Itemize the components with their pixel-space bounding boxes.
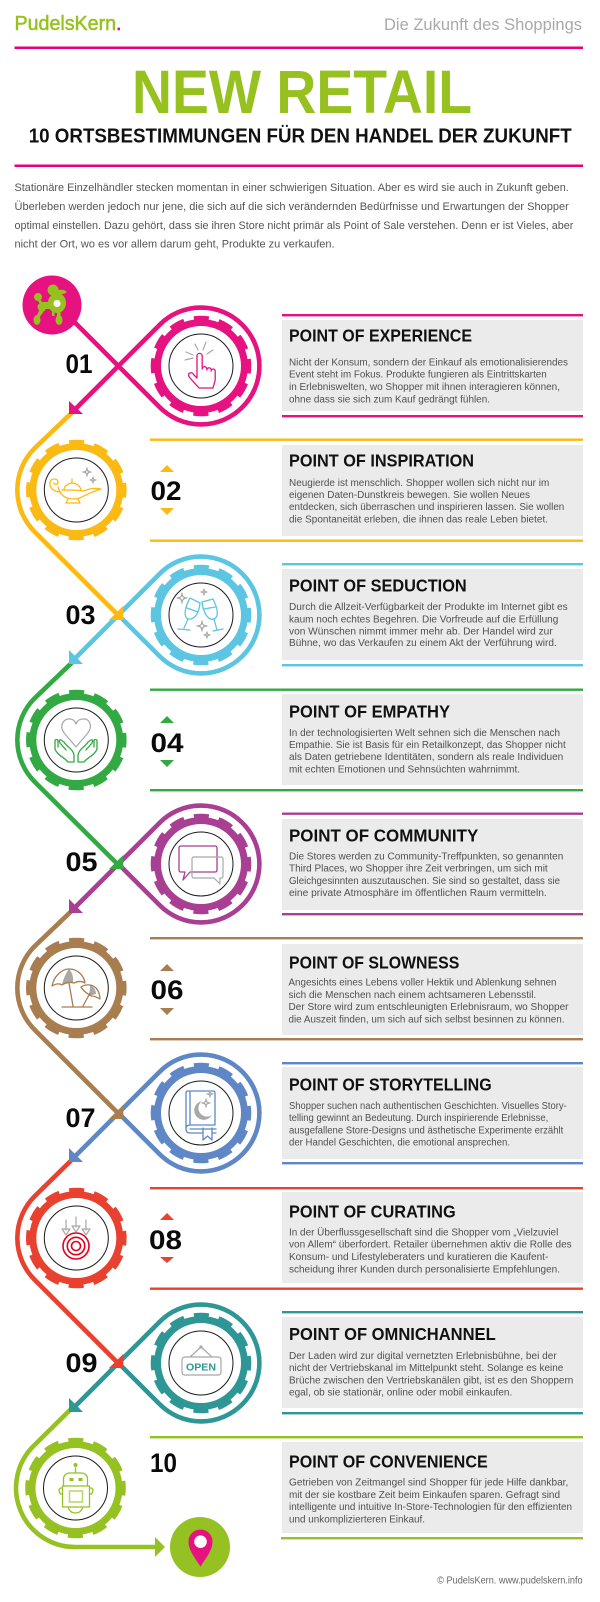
body 07: Shopper suchen nach authentischen Geschichten. Visuelles Story- <box>289 1101 567 1112</box>
step 04: empathy <box>17 650 583 865</box>
body 05: Gleichgesinnten auszutauschen. Sie sind so gestaltet, dass sie <box>289 876 560 887</box>
icon: robot <box>59 1463 93 1513</box>
card 01 <box>282 314 583 417</box>
body 01: Event steht im Fokus. Produkte fungieren als Eintrittskarten <box>289 370 547 381</box>
connector path 05 <box>73 806 259 922</box>
intro text: nicht der Ort, wo es vor allem darum geht, Produkte zu verkaufen. <box>14 239 334 251</box>
body 05: Third Places, wo Shopper ihre Zeit verbringen, um sich mit <box>289 864 548 875</box>
card 07 <box>282 1062 583 1164</box>
intro text: Überleben werden jedoch nur jene, die sich auf die sich verändernden Bedürfnisse und Erwartungen der Shopper <box>14 201 569 213</box>
number 01: 01 <box>66 349 92 379</box>
body 09 <box>289 1351 573 1399</box>
number 10: 10 <box>150 1448 177 1478</box>
heading 07: POINT OF STORYTELLING <box>289 1075 492 1095</box>
step 06: slowness <box>17 899 583 1114</box>
arrow into step 08 <box>69 1148 83 1162</box>
body 02: entdecken, sich überraschen und inspirieren lassen. Sie wollen <box>289 502 564 513</box>
icon: heart in hands <box>55 719 97 762</box>
body 03: Bühne, wo das Verkaufen zu einem Akt der Verführung wird. <box>289 638 557 649</box>
icon: open sign: OPEN <box>186 1362 216 1374</box>
icon: open sign <box>182 1345 221 1375</box>
body 05 <box>289 851 563 899</box>
body 04: Empathie. Sie ist Basis für ein Retailkonzept, das Shopper nicht <box>289 740 566 751</box>
body 10: Getrieben von Zeitmangel sind Shopper für jede Hilfe dankbar, <box>289 1478 568 1489</box>
icon: beach umbrellas <box>52 969 100 1007</box>
body 06: Angesichts eines Lebens voller Hektik und Ablenkung sehnen <box>288 978 556 989</box>
connector path 01 <box>68 308 259 424</box>
gear 08 <box>28 1190 124 1286</box>
body 07: telling gewinnt an Bedeutung. Durch inspirierende Erlebnisse, <box>289 1113 548 1124</box>
arrow into step 02 <box>69 401 83 414</box>
body 01: ohne dass sie sich zum Kauf gedrängt fühlen. <box>289 394 490 405</box>
step 01: experience <box>22 276 583 424</box>
body 05: eine private Atmosphäre im öffentlichen Raum vermitteln. <box>289 888 547 899</box>
number 02 with markers <box>150 465 182 515</box>
step 05: community <box>66 806 583 922</box>
title: NEW RETAIL <box>132 58 472 126</box>
arrow into step 09 <box>109 1354 123 1368</box>
icon: magic lamp <box>50 468 101 503</box>
body 08: von Allem“ überfordert. Retailer übernehmen aktiv die Rolle des <box>289 1240 572 1251</box>
body 08: scheidung ihrer Kunden durch personalisierte Empfehlungen. <box>289 1265 560 1276</box>
card 09 <box>282 1311 583 1414</box>
connector path 03 <box>73 557 259 673</box>
body 10: und unkomplizierteren Einkauf. <box>289 1514 425 1525</box>
heading 09: POINT OF OMNICHANNEL <box>289 1324 496 1344</box>
icon: target with arrows <box>62 1217 90 1259</box>
body 06: die Auszeit finden, um sich auf sich selbst besinnen zu können. <box>288 1014 564 1025</box>
body 07 <box>289 1101 567 1149</box>
connector path 06 <box>17 911 118 1114</box>
card 04 <box>150 688 583 791</box>
card 03 <box>282 563 583 666</box>
body 01 <box>289 358 568 405</box>
connector path 02 <box>17 413 118 615</box>
card 02 <box>150 438 583 542</box>
icon: story book <box>186 1091 216 1140</box>
gear 02 <box>28 442 124 538</box>
arrow into destination <box>155 1537 165 1557</box>
step 10: convenience <box>16 1398 583 1577</box>
body 04: mit echten Emotionen und Sehnsüchten wahrnimmt. <box>289 764 520 775</box>
body 02: Neugierde ist menschlich. Shopper wollen sich nicht nur im <box>289 478 549 489</box>
card 05 <box>282 812 583 915</box>
step 08: curating <box>17 1148 583 1364</box>
heading 06: POINT OF SLOWNESS <box>289 952 459 972</box>
arrow into step 10 <box>69 1398 83 1412</box>
intro text: optimal einstellen. Dazu gehört, dass sie ihren Store nicht primär als Point of Sale verstehen. Denn er ist Vieles, aber <box>14 220 574 232</box>
icon: pointing hand <box>185 342 215 388</box>
body 09: Brüche zwischen den Vertriebskanälen gibt, ist es den Shoppern <box>289 1375 573 1386</box>
number 09: 09 <box>66 1348 98 1378</box>
number 08 with markers: 08 <box>149 1225 182 1255</box>
logo: PudelsKern. <box>14 13 122 35</box>
gear 06 <box>28 940 124 1036</box>
heading 04: POINT OF EMPATHY <box>289 702 450 722</box>
body 02: die Spontaneität erleben, die ihnen das reale Leben bietet. <box>289 515 548 526</box>
connector path 04 <box>17 663 118 865</box>
body 05: Die Stores werden zu Community-Treffpunkten, so genannten <box>289 851 563 862</box>
body 07: der Handel Geschichten, die emotional ansprechen. <box>289 1138 510 1149</box>
number 05: 05 <box>66 847 98 877</box>
body 04: als Daten getriebene Identitäten, sondern als reale Individuen <box>289 752 563 763</box>
arrow into step 04 <box>69 650 83 664</box>
gear 01 <box>153 318 249 414</box>
arrow into step 07 <box>109 1105 123 1119</box>
body 07: ausgefallene Store-Designs und ästhetische Experimente erzählt <box>289 1125 564 1136</box>
body 10 <box>289 1478 572 1525</box>
number 04 with markers <box>150 716 184 767</box>
icon: poodle start badge <box>22 276 82 334</box>
card 08 <box>150 1187 583 1290</box>
header <box>14 13 582 35</box>
body 08: In der Überflussgesellschaft sind die Shopper vom „Vielzuviel <box>289 1227 558 1239</box>
number 02 with markers: 02 <box>150 476 182 506</box>
body 09: Der Laden wird zur digital vernetzten Erlebnisbühne, bei der <box>289 1351 557 1362</box>
icon: speech bubbles <box>179 846 223 884</box>
number 03: 03 <box>66 600 96 630</box>
gear 07 <box>153 1065 249 1161</box>
icon: champagne glasses <box>177 589 223 638</box>
step 09: omnichannel <box>66 1305 583 1421</box>
tagline: Die Zukunft des Shoppings <box>384 15 582 34</box>
body 03 <box>289 602 568 649</box>
intro text: Stationäre Einzelhändler stecken momentan in einer schwierigen Situation. Aber es wird sie auch in Zukunft geben. <box>14 182 569 194</box>
heading 08: POINT OF CURATING <box>289 1201 456 1221</box>
body 03: kaum noch echtes Begehren. Die Vorfreude auf die Erfüllung <box>289 614 558 625</box>
body 02: eigenen Daten-Dunstkreis bewegen. Sie wollen Neues <box>289 490 530 501</box>
arrow into step 03 <box>109 606 123 620</box>
body 10: intelligente und intuitive In-Store-Technologien für den effizienten <box>289 1502 572 1513</box>
gear 03 <box>153 567 249 663</box>
number 06 with markers: 06 <box>150 975 184 1005</box>
card 06 <box>150 937 583 1040</box>
gear 05 <box>153 816 249 912</box>
step 07: storytelling <box>66 1055 583 1171</box>
body 01: Nicht der Konsum, sondern der Einkauf als emotionalisierendes <box>289 358 568 369</box>
body 09: nicht der Vertriebskanal im Mittelpunkt steht. Solange es keine <box>289 1363 564 1374</box>
body 03: Durch die Allzeit-Verfügbarkeit der Produkte im Internet gibt es <box>289 602 568 613</box>
body 06: Der Store wird zum entschleunigten Erlebnisraum, wo Shopper <box>288 1002 569 1013</box>
connector path 09 <box>73 1305 259 1421</box>
body 03: von Wünschen nimmt immer mehr ab. Der Handel wird zur <box>289 626 553 637</box>
gear 09 <box>153 1315 249 1411</box>
number 06 with markers <box>150 964 184 1015</box>
connector path 08 <box>17 1160 118 1364</box>
body 01: in Erlebniswelten, wo Shopper mit ihnen interagieren können, <box>289 382 560 393</box>
intro text <box>14 182 574 251</box>
heading 01: POINT OF EXPERIENCE <box>289 326 472 346</box>
connector path 10 <box>16 1409 157 1547</box>
subtitle: 10 ORTSBESTIMMUNGEN FÜR DEN HANDEL DER ZUKUNFT <box>29 125 572 148</box>
body 10: mit der sie kostbare Zeit beim Einkaufen sparen. Gefragt sind <box>289 1490 560 1501</box>
body 06 <box>288 978 569 1025</box>
copyright footer: © PudelsKern. www.pudelskern.info <box>437 1575 583 1586</box>
number 07: 07 <box>66 1103 96 1133</box>
body 06: sich die Menschen nach einem achtsameren Lebensstil. <box>288 990 536 1001</box>
body 02 <box>289 478 564 526</box>
step 03: seduction <box>66 557 583 673</box>
connector path 07 <box>73 1055 259 1171</box>
number 04 with markers: 04 <box>150 728 184 758</box>
arrow into step 05 <box>109 855 123 869</box>
step 02: inspiration <box>17 401 583 615</box>
body 04 <box>289 728 566 775</box>
card 10 <box>150 1436 583 1539</box>
heading 02: POINT OF INSPIRATION <box>289 451 474 471</box>
body 08 <box>289 1227 572 1276</box>
body 09: egal, ob sie stationär, online oder mobil einkaufen. <box>289 1388 512 1399</box>
body 04: In der technologisierten Welt sehnen sich die Menschen nach <box>289 728 560 739</box>
body 08: Konsum- und Lifestyleberaters und kuratieren die Kaufent- <box>289 1252 548 1263</box>
gear 04 <box>28 692 124 788</box>
gear 10 <box>28 1440 124 1536</box>
heading 03: POINT OF SEDUCTION <box>289 576 467 596</box>
heading 05: POINT OF COMMUNITY <box>289 826 479 846</box>
number 08 with markers <box>149 1213 182 1263</box>
icon: destination pin <box>170 1517 230 1577</box>
heading 10: POINT OF CONVENIENCE <box>289 1451 488 1471</box>
arrow into step 06 <box>69 899 83 913</box>
